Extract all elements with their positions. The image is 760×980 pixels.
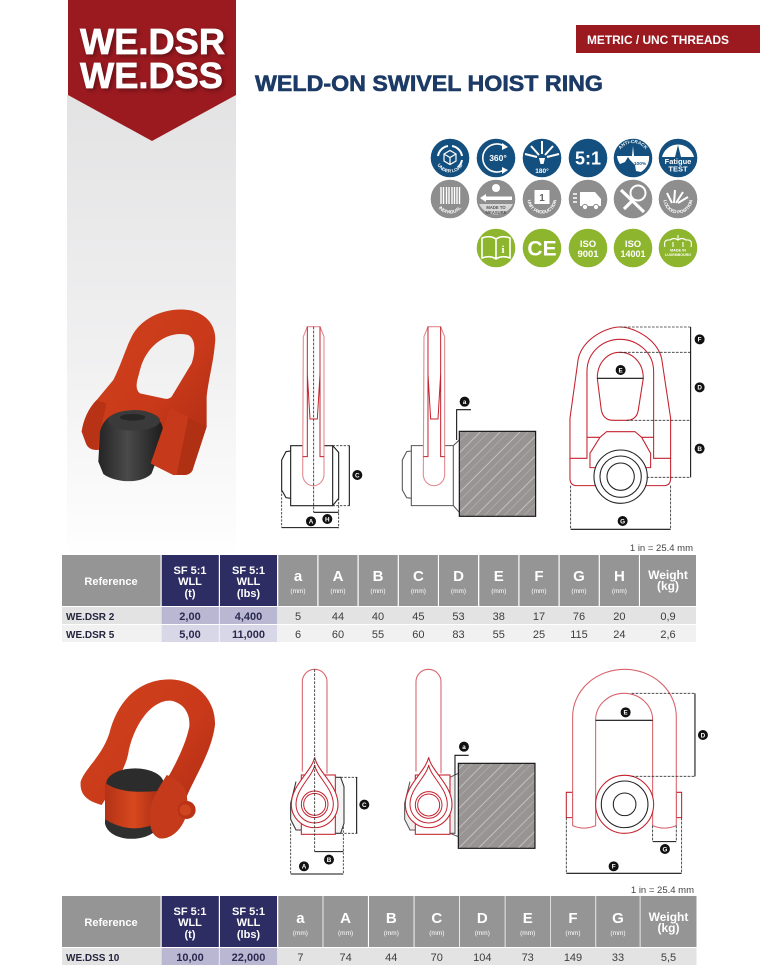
front view [566, 669, 695, 873]
table header: H [614, 568, 625, 585]
row: WE.DSS 10: 44 [385, 952, 397, 964]
table header: C [413, 568, 424, 585]
row: WE.DSR 5: 25 [533, 629, 545, 641]
table header: B [373, 568, 384, 585]
icon: anti-crack: ANTI-CRACK [619, 140, 648, 150]
black bottom [105, 818, 157, 839]
icon: 360 degrees: 360° [489, 153, 507, 163]
table header: A [333, 568, 344, 585]
row: WE.DSS 10: 10,00 [176, 952, 204, 964]
row: WE.DSR 2: WE.DSR 2 [66, 612, 115, 623]
table header: (t) [184, 929, 196, 941]
red cylinder [105, 783, 162, 828]
row: WE.DSR 5 [62, 625, 696, 642]
row: WE.DSR 5: 115 [570, 629, 588, 641]
thread type tag: METRIC / UNC THREADS [587, 33, 729, 47]
table: WE.DSS [62, 896, 696, 965]
table header: A [340, 910, 351, 927]
dimension labels: E [619, 367, 623, 374]
icon: unit production [522, 180, 562, 218]
icon: ISO 14001: ISO [625, 239, 641, 250]
red banner: WE.DSR [80, 21, 225, 62]
table header: (mm) [612, 588, 627, 595]
icon: CE mark: CE [527, 238, 557, 260]
icon: unit production: UNIT PRODUCTION [528, 200, 556, 214]
row: WE.DSR 2: 2,00 [179, 611, 201, 623]
dimension labels: E [624, 710, 628, 717]
icon: locked position: LOCKED POSITION [664, 200, 692, 214]
icon: made to measure: MEASURE [486, 210, 507, 215]
row: WE.DSR 2: 44 [332, 611, 344, 623]
table header: F [534, 568, 544, 585]
table header: WLL [237, 576, 261, 588]
row: WE.DSS 10: 104 [473, 952, 491, 964]
table header: Weight [648, 568, 688, 582]
table header: (mm) [338, 930, 353, 937]
dimension labels: C [355, 472, 360, 479]
dimension labels: C [362, 802, 367, 809]
table header: (mm) [429, 930, 444, 937]
icon: fatigue test: Fatigue [665, 157, 691, 166]
table header: (mm) [531, 588, 547, 595]
table header: SF 5:1 [232, 906, 265, 918]
dimension labels: a [463, 399, 467, 406]
dimension labels: D [701, 732, 706, 739]
dimension labels: F [698, 337, 702, 344]
welded view [405, 669, 535, 848]
icon: locked position [658, 180, 698, 218]
table header: (mm) [411, 588, 426, 595]
sidebar gradient panel [67, 95, 236, 565]
dimension labels: a [462, 744, 466, 751]
row: WE.DSS 10: 5,5 [661, 952, 676, 964]
row: WE.DSR 2: 53 [452, 611, 465, 623]
icon: 180 degrees: 180° [535, 167, 549, 175]
dimension labels: D [697, 385, 702, 392]
icon: anti-crack [614, 138, 652, 178]
dimension labels: B [327, 857, 332, 864]
icon: made in Luxembourg: LUXEMBOURG [665, 253, 691, 257]
table header: Reference [84, 576, 138, 588]
table header: a [296, 910, 305, 927]
icon: ISO 9001: 9001 [577, 249, 599, 260]
table header: (t) [184, 588, 196, 600]
dimension labels [299, 707, 708, 871]
row: WE.DSS 10: 149 [564, 952, 582, 964]
icon: fatigue test: TEST [668, 164, 688, 174]
table header: G [573, 568, 585, 585]
icon: under load [430, 138, 470, 178]
dimension labels: B [697, 446, 702, 453]
front view [570, 327, 691, 529]
icon: 5:1 safety factor: 5:1 [575, 148, 601, 168]
title: WELD-ON SWIVEL HOIST RING [255, 71, 603, 96]
row: WE.DSR 2 [62, 607, 696, 624]
bail [82, 310, 215, 475]
table header: (mm) [571, 588, 587, 595]
row: WE.DSR 5: 60 [332, 629, 344, 641]
table header: SF 5:1 [232, 565, 265, 577]
dimension labels: H [325, 516, 330, 523]
dimension labels [306, 334, 705, 526]
table header: (lbs) [237, 588, 260, 600]
welded view [402, 327, 536, 516]
row: WE.DSR 5: 5,00 [179, 629, 201, 641]
table header: (mm) [384, 930, 399, 937]
row: WE.DSR 2: 5 [295, 611, 301, 623]
icon: anti-crack: 100% [634, 161, 647, 167]
table header: SF 5:1 [173, 906, 207, 918]
table header: Weight [649, 910, 688, 924]
icon: 5:1 safety factor [569, 139, 607, 177]
table header: E [523, 910, 533, 927]
table header: (mm) [293, 930, 308, 937]
table header: B [386, 910, 397, 927]
row: WE.DSR 2: 38 [493, 611, 505, 623]
table header: WLL [178, 917, 202, 929]
icon: manual [477, 229, 515, 267]
table header: E [494, 568, 504, 585]
table header: D [453, 568, 464, 585]
dimension labels: G [620, 518, 625, 525]
side view [291, 669, 357, 874]
table header: (mm) [610, 930, 626, 937]
row: WE.DSS 10 [62, 948, 696, 965]
table header: WLL [178, 576, 202, 588]
scale note 2: 1 in = 25.4 mm [631, 885, 694, 896]
table header: (kg) [657, 579, 679, 593]
technical drawing: WE.DSR views [282, 327, 705, 529]
row: WE.DSR 5: 2,6 [660, 629, 676, 641]
photo: WE.DSR hoist ring [82, 310, 215, 481]
icon: ISO 14001 [614, 229, 652, 267]
icon: 180 degrees [523, 139, 561, 177]
table header: F [568, 910, 578, 927]
icon: individual barcode [430, 180, 470, 218]
table header: (mm) [330, 588, 346, 595]
icon: ISO 9001 [569, 229, 607, 267]
row: WE.DSR 5: 55 [372, 629, 384, 641]
row: WE.DSS 10: 74 [339, 952, 352, 964]
shackle bow [81, 679, 215, 838]
icon: delivery van [569, 180, 607, 218]
icon: ISO 9001: ISO [580, 239, 596, 250]
table header: (mm) [290, 588, 306, 595]
row: WE.DSR 2: 4,400 [235, 611, 262, 623]
table header: (mm) [491, 588, 506, 595]
icon: manual: i [501, 244, 505, 256]
table header: (mm) [565, 930, 581, 937]
scale note 1: 1 in = 25.4 mm [630, 543, 693, 554]
table header: (kg) [658, 921, 680, 935]
dimension labels: G [662, 846, 667, 853]
row: WE.DSR 2: 0,9 [660, 611, 676, 623]
row: WE.DSR 5: 83 [452, 629, 465, 641]
table header: (mm) [520, 930, 535, 937]
photo: WE.DSS hoist ring [81, 679, 215, 839]
thread type tag [576, 25, 760, 53]
row: WE.DSS 10: 70 [431, 952, 443, 964]
table header: Reference [84, 917, 138, 929]
row: WE.DSR 2: 76 [573, 611, 585, 623]
row: WE.DSR 2: 45 [412, 611, 425, 623]
icon: individual barcode: INDIVIDUAL [438, 206, 462, 214]
icon: made to measure: MADE TO [486, 205, 506, 210]
row: WE.DSR 5: 24 [613, 629, 626, 641]
icon: made in Luxembourg: MADE IN [670, 248, 686, 252]
pin head [178, 801, 196, 819]
table header: (mm) [451, 588, 466, 595]
right end of bow [150, 775, 188, 838]
table header [62, 555, 696, 606]
row: WE.DSR 2: 40 [372, 611, 384, 623]
row: WE.DSS 10: 33 [612, 952, 624, 964]
table header: a [294, 568, 303, 585]
table header: SF 5:1 [173, 565, 207, 577]
row: WE.DSR 2: 17 [533, 611, 545, 623]
table header: (lbs) [237, 929, 260, 941]
icon grid [430, 138, 698, 268]
dimension labels: A [302, 864, 307, 871]
black top [106, 768, 164, 798]
icon: tools [614, 180, 652, 218]
icon: under load: UNDER LOAD [438, 163, 462, 172]
black swivel body [98, 410, 163, 481]
table header: D [477, 910, 488, 927]
icon: made to measure [477, 180, 515, 218]
dimension labels: A [309, 519, 314, 526]
row: WE.DSR 5: 55 [493, 629, 505, 641]
table header: WLL [237, 917, 261, 929]
technical drawing: WE.DSS views [291, 669, 708, 874]
dimension labels: F [612, 864, 616, 871]
red banner [68, 0, 236, 141]
welded block [458, 763, 535, 848]
row: WE.DSR 5: 60 [412, 629, 425, 641]
table header: (mm) [475, 930, 490, 937]
row: WE.DSR 5: 11,000 [232, 629, 265, 641]
icon: CE mark [523, 229, 561, 267]
row: WE.DSS 10: 7 [297, 952, 303, 964]
table header: G [612, 910, 624, 927]
right leg of bail [151, 407, 207, 475]
table header: C [431, 910, 442, 927]
row: WE.DSS 10: 22,000 [232, 952, 265, 964]
row: WE.DSR 5: WE.DSR 5 [66, 630, 115, 641]
row: WE.DSR 5: 6 [295, 629, 301, 641]
table: WE.DSR [62, 555, 696, 642]
row: WE.DSS 10: 73 [522, 952, 534, 964]
icon: unit production: 1 [539, 193, 545, 204]
icon: ISO 14001: 14001 [620, 249, 646, 259]
welded block [459, 431, 536, 516]
side view [282, 327, 350, 528]
shaded lower face of bail [82, 400, 107, 450]
icon: 360 degrees [477, 139, 515, 177]
row: WE.DSR 2: 20 [613, 611, 626, 623]
icon: fatigue test [659, 139, 697, 177]
row: WE.DSS 10: WE.DSS 10 [66, 953, 120, 964]
icon: made in Luxembourg [659, 229, 697, 267]
table header: (mm) [370, 588, 386, 595]
red banner: WE.DSS [80, 55, 223, 96]
table header [62, 896, 696, 947]
